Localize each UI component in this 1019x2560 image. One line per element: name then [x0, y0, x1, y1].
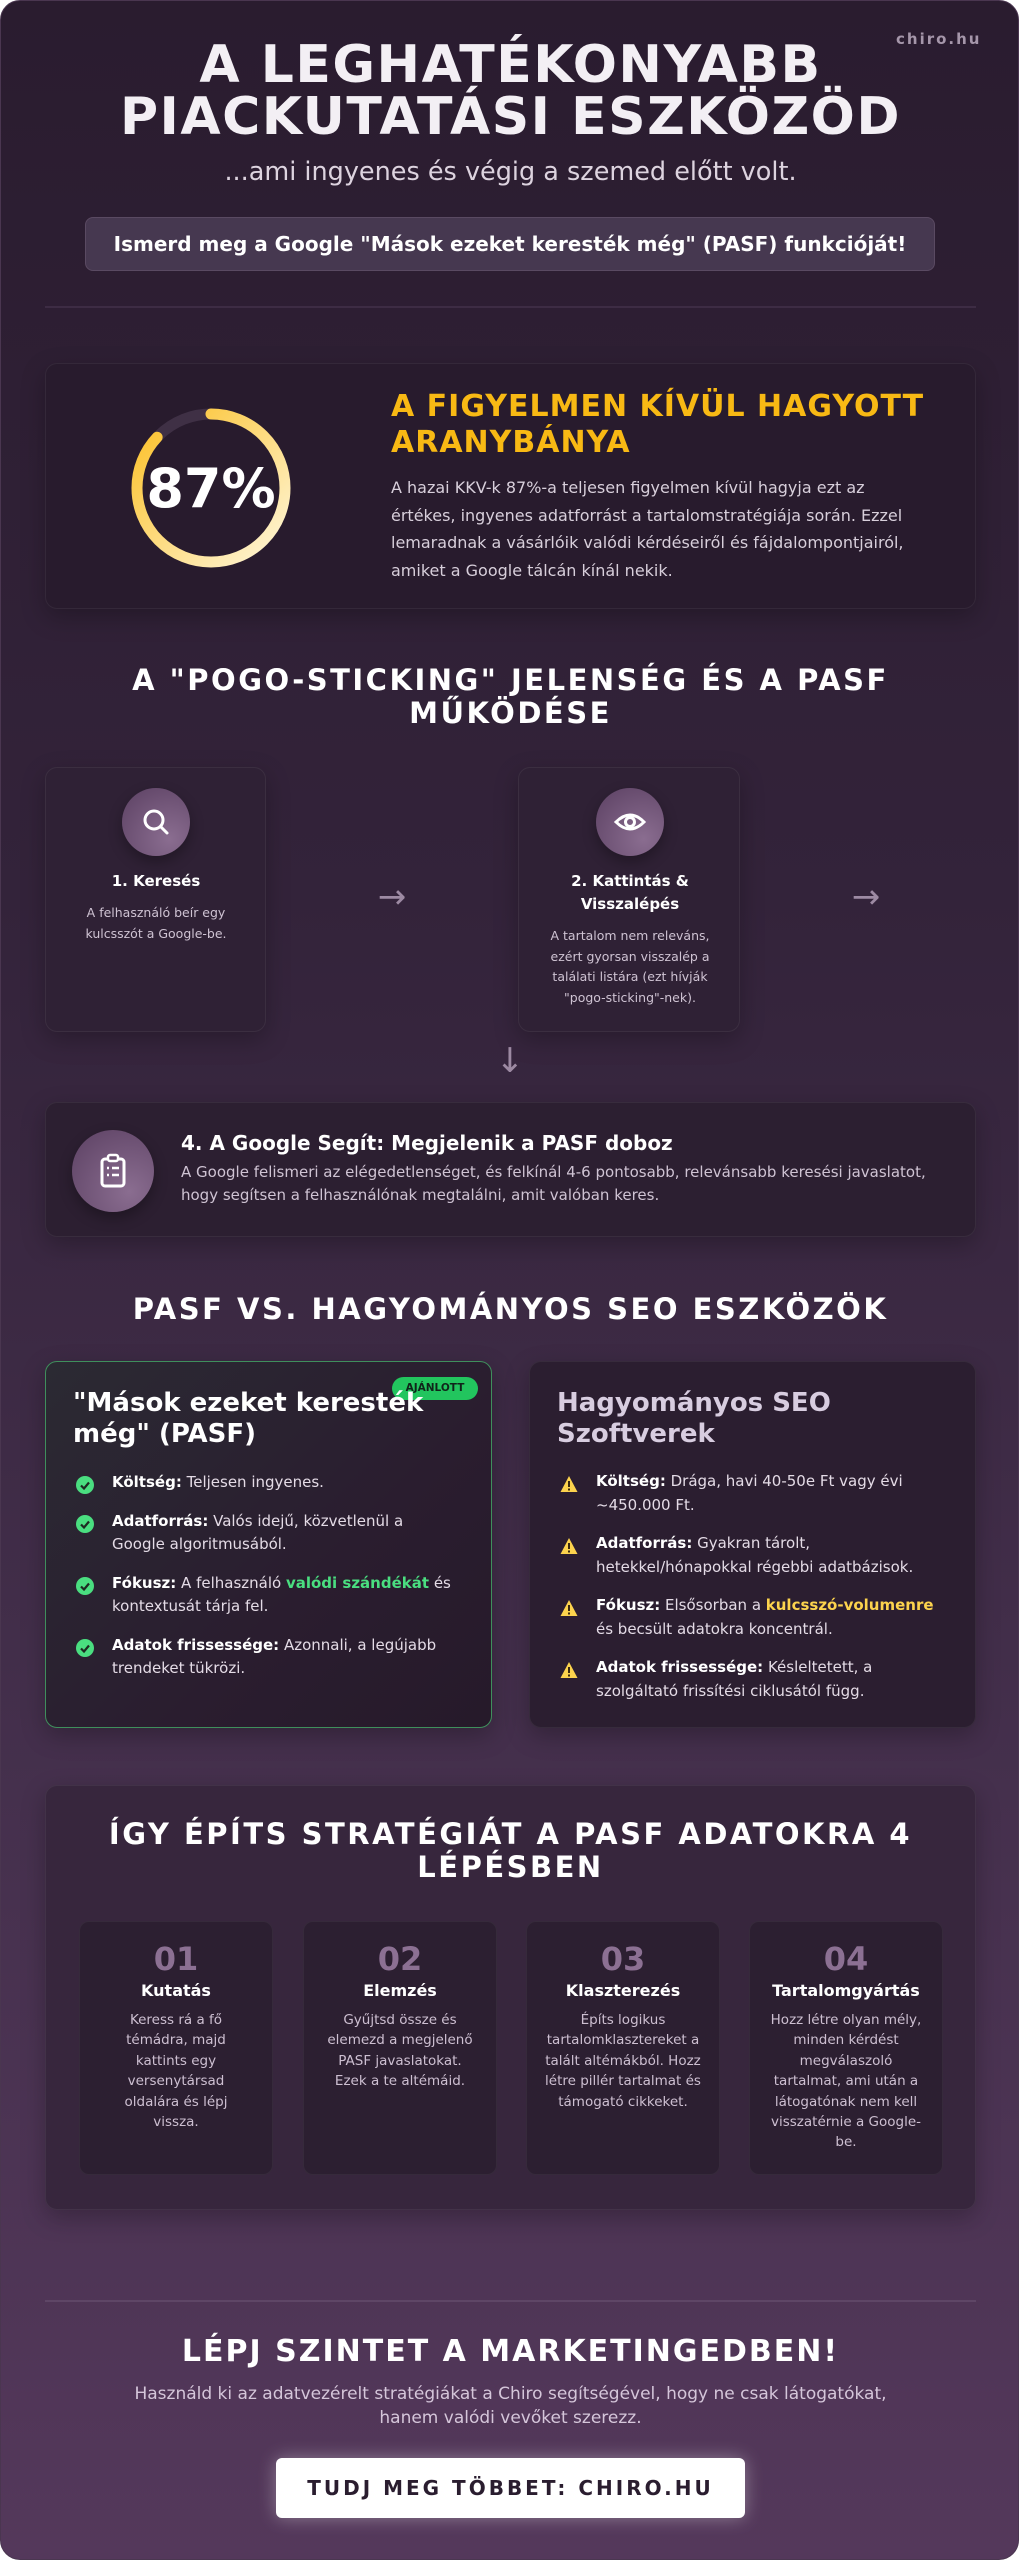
heading: strategy: ÍGY ÉPÍTS STRATÉGIÁT A PASF ADATOKRA 4: [109, 1817, 912, 1851]
brand: chiro.hu: chiro.hu: [896, 30, 981, 48]
arrow down: ↓: [496, 1041, 524, 1081]
step card 04: [749, 1921, 943, 2175]
text: CTA: [134, 2384, 887, 2428]
chart: 87% ring: 87%: [146, 457, 276, 520]
text: stat description: A hazai KKV-k 87%-a teljesen figyelmen kívül hagyja ezt az értékes, ingyenes adatforrást a tartalomstratégiája során. Ezzel lemaradnak a vásárlóik valódi kérdéseiről és fájdalompontjairól, amiket a Google tálcán kínál nekik.: [391, 478, 904, 580]
heading: pogo-sticking: A "POGO-STICKING" JELENSÉG ÉS A PASF: [132, 663, 889, 697]
button: CTA: TUDJ MEG TÖBBET: CHIRO.HU: [307, 2476, 714, 2500]
heading: hagyományos: Hagyományos SEO Szoftverek: [557, 1388, 831, 1449]
panel: 4-step strategy: [45, 1785, 976, 2210]
step card 02: Elemzés: [363, 1981, 437, 2000]
text: step 4: [181, 1131, 926, 1204]
card: step 2 click & back: Visszalépés: [581, 895, 679, 913]
list: traditional drawbacks: Költség: Drága, havi 40-50e Ft vagy évi ~450.000 Ft.: [596, 1472, 903, 1514]
list: traditional drawbacks: Adatok frissessége: Késleltetett, a szolgáltató frissítési ciklusától függ.: [596, 1658, 872, 1700]
text: CTA: hanem valódi vevőket szerezz.: [379, 2408, 642, 2428]
step card 02: 02: [378, 1940, 422, 1978]
list: traditional drawbacks: Adatforrás: Gyakran tárolt, hetekkel/hónapokkal régebbi adatbázisok.: [596, 1534, 913, 1576]
card: step 1 search: [45, 767, 266, 1032]
arrow right 2: →: [852, 877, 880, 917]
panel: traditional SEO card: [529, 1361, 976, 1728]
list: PASF advantages: Költség: Teljesen ingyenes.: [112, 1473, 324, 1491]
heading: pogo-sticking: MŰKÖDÉSE: [409, 696, 612, 730]
text: step 4: A Google felismeri az elégedetlenséget, és felkínál 4-6 pontosabb, relevánsabb keresési javaslatot, hogy segítsen a felhasználónak megtalálni, amit valóban keres.: [181, 1163, 926, 1204]
text: step 4: 4. A Google Segít: Megjelenik a PASF doboz: [181, 1131, 673, 1155]
step card 01: 01: [154, 1940, 198, 1978]
chart: 87% ring: [132, 408, 290, 568]
heading: aranybánya: ARANYBÁNYA: [391, 425, 631, 460]
text: CTA: Használd ki az adatvezérelt stratégiákat a Chiro segítségével, hogy ne csak látogatókat,: [134, 2384, 887, 2404]
step card 03: [526, 1921, 720, 2175]
subtitle: ...ami ingyenes és végig a szemed előtt volt.: [224, 157, 797, 187]
card: step 1 search: A felhasználó beír egy kulcsszót a Google-be.: [85, 905, 227, 940]
intro pill: Ismerd meg a Google "Mások ezeket keresték még" (PASF) funkcióját!: [114, 232, 906, 256]
step card 04: Hozz létre olyan mély, minden kérdést megválaszoló tartalmat, ami után a látogatónak nem kell visszatérnie a Google-be.: [771, 2012, 921, 2150]
title: PIACKUTATÁSI ESZKÖZÖD: [120, 87, 901, 147]
step card 03: 03: [601, 1940, 645, 1978]
card: step 2 click & back: A tartalom nem releváns, ezért gyorsan visszalép a találati listára (ezt hívják "pogo-sticking"-nek).: [550, 928, 710, 1004]
step card 03: Klaszterezés: [566, 1981, 680, 2000]
list: PASF advantages: Adatforrás: Valós idejű, közvetlenül a: [112, 1512, 403, 1530]
step card 04: Tartalomgyártás: [772, 1981, 920, 2000]
icon: eye: [596, 788, 664, 856]
step card 04: 04: [824, 1940, 868, 1978]
icon: magnifier: [122, 788, 190, 856]
step card 03: Építs logikus tartalomklasztereket a talált altémákból. Hozz létre pillér tartalmat és támogató cikkeket.: [545, 2012, 701, 2110]
title: A LEGHATÉKONYABB: [199, 35, 822, 95]
heading: aranybánya: A FIGYELMEN KÍVÜL HAGYOTT: [391, 389, 924, 424]
panel: stat 87%: [45, 363, 976, 609]
heading: CTA: LÉPJ SZINTET A MARKETINGEDBEN!: [182, 2334, 839, 2369]
list: PASF advantages: [76, 1473, 451, 1677]
heading: aranybánya: [391, 388, 924, 460]
panel: PASF card: [45, 1361, 492, 1728]
card: step 1 search: 1. Keresés: [112, 872, 200, 890]
list: PASF advantages: Google algoritmusából.: [112, 1535, 287, 1553]
list: PASF advantages: Adatok frissessége: Azonnali, a legújabb trendeket tükrözi.: [112, 1636, 436, 1677]
step card 01: Kutatás: [141, 1981, 211, 2000]
badge: ajánlott: AJÁNLOTT: [406, 1382, 464, 1394]
step card 02: [303, 1921, 497, 2175]
button: CTA: [276, 2458, 745, 2518]
card: step 2 click & back: 2. Kattintás &: [571, 872, 689, 890]
list: traditional drawbacks: Fókusz: Elsősorban a kulcsszó-volumenre és becsült adatokra koncentrál.: [596, 1596, 934, 1638]
badge: ajánlott: [392, 1377, 478, 1400]
step card 01: [79, 1921, 273, 2175]
step card 02: Gyűjtsd össze és elemezd a megjelenő PASF javaslatokat. Ezek a te altémáid.: [327, 2012, 473, 2089]
card: step 4 PASF box: [45, 1102, 976, 1237]
card: step 2 click & back: [518, 767, 740, 1032]
list: traditional drawbacks: [560, 1472, 934, 1700]
title: [120, 34, 901, 147]
heading: PASF: "Mások ezeket keresték még" (PASF): [73, 1388, 423, 1449]
icon: clipboard: [72, 1130, 154, 1212]
arrow right 1: →: [378, 877, 406, 917]
heading: strategy: LÉPÉSBEN: [417, 1850, 604, 1884]
step card 01: Keress rá a fő témádra, majd kattints egy versenytársad oldalára és lépj vissza.: [124, 2012, 228, 2130]
list: PASF advantages: Fókusz: A felhasználó valódi szándékát és kontextusát tárja fel.: [112, 1574, 451, 1615]
intro pill: [85, 217, 935, 271]
heading: strategy: [109, 1816, 912, 1884]
heading: pogo-sticking: [132, 662, 889, 730]
heading: comparison: PASF VS. HAGYOMÁNYOS SEO ESZKÖZÖK: [133, 1292, 888, 1326]
